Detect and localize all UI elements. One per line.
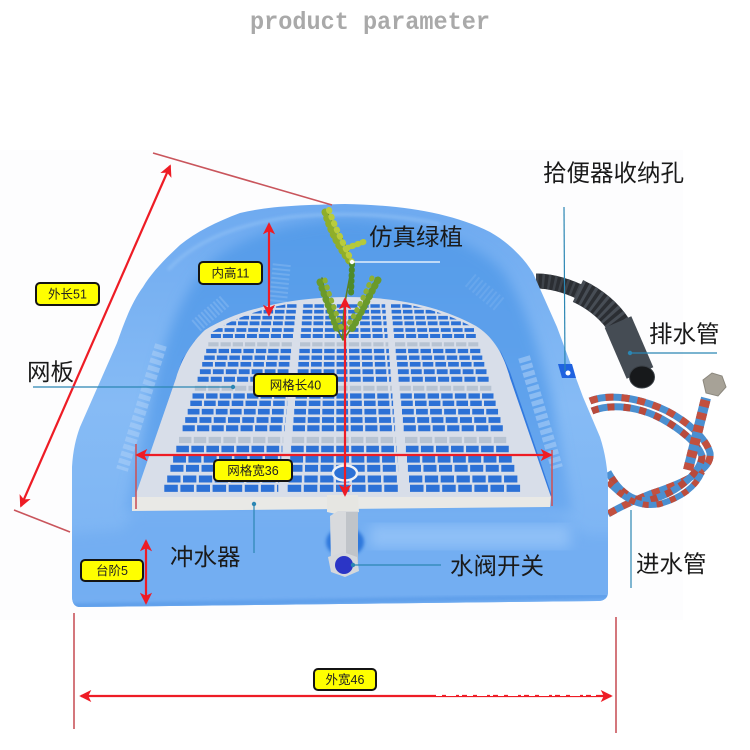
flusher bar [132,497,551,511]
tray inner basin [60,219,620,610]
label: drain pipe [628,321,720,355]
dimension: inner height [199,224,269,315]
tray body [72,204,608,607]
label: water inlet pipe [631,510,706,588]
label: valve switch [351,553,544,579]
dimension: outer width [74,613,616,733]
tray front highlight [370,525,570,548]
background [0,150,683,620]
dimension: mesh width: 网格宽36 [227,463,279,478]
label: flusher [170,502,256,570]
tray front face [72,518,608,607]
drain hose [536,281,654,388]
dimension: step height [81,541,146,603]
label: water inlet pipe: 进水管 [636,551,706,577]
artificial plant [320,210,378,340]
dimension: mesh length [254,299,345,495]
drain hole [333,466,357,480]
label: flusher: 冲水器 [170,544,240,570]
dimension: mesh width [136,444,552,509]
label: artificial plant: 仿真绿植 [369,224,463,250]
water valve [326,495,364,577]
tray rim highlight [168,214,440,270]
storage hole [558,364,576,378]
dimension: outer length [14,153,332,532]
dark crease beside mesh panel [135,340,552,498]
tray bottom edge [72,596,608,606]
label: mesh board [27,359,235,389]
dimension: outer length: 外长51 [48,288,87,302]
label: valve switch: 水阀开关 [450,553,544,579]
dimension: inner height: 内高11 [212,266,250,280]
dimension: outer width: 外宽46 [326,672,364,687]
label: artificial plant [350,224,463,264]
mesh holes [164,306,522,488]
label: mesh board: 网板 [27,359,74,385]
dimension: mesh length: 网格长40 [270,378,321,392]
label: drain pipe: 排水管 [649,321,720,347]
water inlet hose [590,373,726,514]
dimension: step height: 台阶5 [96,563,128,578]
mesh panel [135,297,551,497]
label: scooper storage hole: 拾便器收纳孔 [543,160,684,186]
title: product parameter [250,8,490,37]
tray wall vents [122,262,557,470]
